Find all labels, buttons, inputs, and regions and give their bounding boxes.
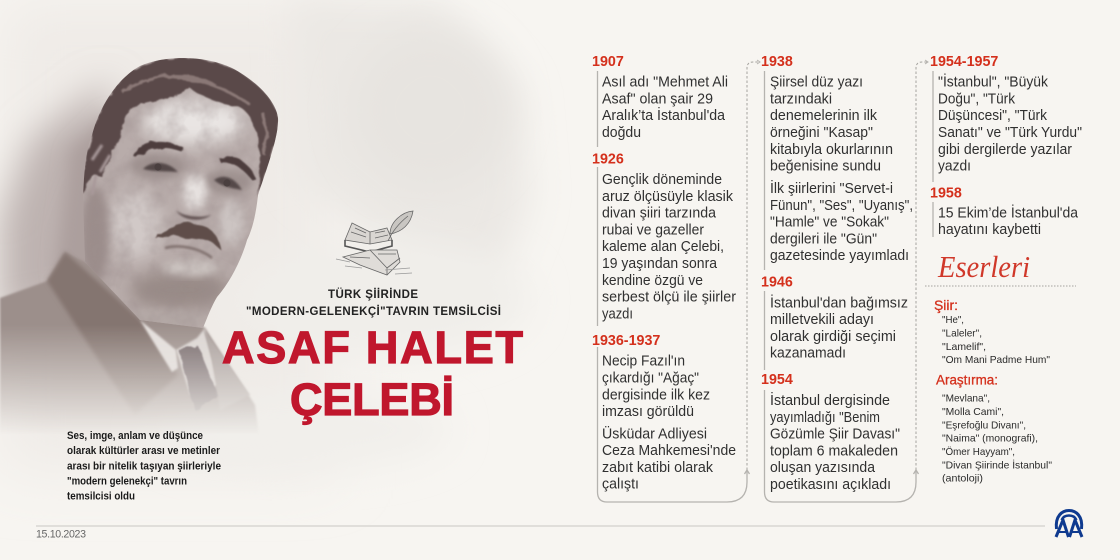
list: Araştırma: "Mevlana",: [942, 394, 990, 405]
timeline column 1: Aralık’ta İstanbul'da: [602, 106, 726, 124]
timeline column 2: kitabıyla okurlarının: [770, 142, 893, 158]
timeline column 2: gazetesinde yayımladı: [770, 248, 909, 264]
timeline column 1: Necip Fazıl'ın: [602, 354, 685, 370]
timeline column 1: Asıl adı "Mehmet Ali: [602, 75, 728, 91]
nose: [176, 210, 212, 220]
timeline column 3: "İstanbul", "Büyük: [938, 73, 1049, 91]
list: Araştırma: (antoloji): [942, 474, 983, 485]
footer line: [36, 525, 1045, 527]
mustache: [155, 224, 221, 250]
timeline column 2: Fünun", "Ses", "Uyanış",: [770, 198, 913, 214]
timeline column 2: 1938: [761, 54, 793, 70]
list: Araştırma: "Naima" (monografi),: [942, 434, 1038, 445]
note text: Ses, imge, anlam ve düşünce: [67, 430, 203, 442]
timeline column 1: [592, 54, 760, 502]
timeline column 3: gibi dergilerde yazılar: [938, 142, 1072, 158]
timeline column 3: Doğu", "Türk: [938, 91, 1016, 107]
timeline column 2: Gözümle Şiir Davası": [770, 427, 900, 443]
timeline column 1: zabıt katibi olarak: [602, 460, 714, 476]
date: 15.10.2023: [36, 529, 86, 541]
icon: books and quill: [336, 211, 413, 275]
timeline column 3: yazdı: [938, 159, 971, 175]
timeline column 2: olarak girdiği seçimi: [770, 329, 896, 345]
timeline column 2: "Hamle" ve "Sokak": [770, 215, 889, 231]
list: Araştırma: "Molla Cami",: [942, 407, 1004, 418]
note text: arası bir nitelik taşıyan şiirleriyle: [67, 460, 221, 472]
subtitle: [246, 288, 501, 318]
timeline column 1: aruz ölçüsüyle klasik: [602, 189, 734, 205]
timeline column 1: Gençlik döneminde: [602, 172, 722, 188]
title: ASAF HALET: [222, 322, 523, 373]
timeline column 1: çıkardığı "Ağaç": [602, 370, 699, 386]
hair: [78, 58, 278, 198]
eyes: [143, 163, 178, 172]
timeline column 2: İlk şiirlerini "Servet-i: [770, 179, 893, 197]
timeline column 3: 1958: [930, 185, 962, 201]
timeline column 1: divan şiiri tarzında: [602, 206, 717, 222]
timeline column 1: çalıştı: [602, 477, 639, 493]
title: [222, 322, 523, 425]
list: Şiir: "He",: [942, 315, 964, 326]
timeline column 2: milletvekili adayı: [770, 312, 874, 328]
list: Araştırma: [936, 372, 1052, 485]
timeline column 2: İstanbul'dan bağımsız: [770, 293, 908, 311]
subtitle: TÜRK ŞİİRİNDE: [328, 288, 418, 301]
portrait: head: [78, 50, 280, 330]
subtitle: "MODERN-GELENEKÇİ"TAVRIN TEMSİLCİSİ: [246, 305, 501, 318]
portrait: jacket and shirt: [0, 251, 256, 426]
timeline column 2: dergileri ile "Gün": [770, 231, 877, 247]
timeline column 1: 19 yaşından sonra: [602, 256, 718, 272]
list: Araştırma: "Eşrefoğlu Divanı",: [942, 420, 1026, 431]
eyebrows: [133, 142, 184, 158]
list: Şiir: "Laleler",: [942, 328, 982, 340]
list: Şiir: "Lamelif",: [942, 342, 986, 353]
timeline column 3: Sanatı" ve "Türk Yurdu": [938, 125, 1082, 141]
list: Şiir: Şiir:: [934, 298, 958, 313]
timeline column 2: Şiirsel düz yazı: [770, 75, 863, 91]
timeline column 2: 1954: [761, 372, 793, 388]
timeline column 3: hayatını kaybetti: [938, 222, 1041, 238]
timeline column 1: 1926: [592, 151, 624, 167]
timeline column 3: Düşüncesi", "Türk: [938, 108, 1048, 124]
timeline column 1: Ceza Mahkemesi'nde: [602, 443, 736, 459]
timeline column 1: yazdı: [602, 306, 633, 322]
timeline column 1: 1936-1937: [592, 333, 660, 349]
timeline column 1: Asaf" olan şair 29: [602, 91, 713, 107]
timeline column 1: kaleme alan Çelebi,: [602, 239, 724, 255]
timeline column 2: [761, 54, 928, 502]
timeline column 2: toplam 6 makaleden: [770, 443, 898, 459]
timeline column 1: doğdu: [602, 125, 641, 141]
timeline column 2: beğenisine sundu: [770, 159, 881, 175]
title: ÇELEBİ: [290, 374, 454, 425]
timeline column 2: örneğini "Kasap": [770, 125, 873, 141]
timeline column 2: denemelerinin ilk: [770, 108, 878, 124]
list: Araştırma: "Ömer Hayyam",: [942, 446, 1015, 458]
timeline column 1: 1907: [592, 54, 624, 70]
timeline column 2: 1946: [761, 275, 793, 291]
note text: [67, 430, 221, 503]
timeline column 2: poetikasını açıkladı: [770, 477, 891, 493]
timeline column 1: imzası görüldü: [602, 404, 694, 420]
timeline column 2: kazanamadı: [770, 346, 846, 362]
timeline column 2: İstanbul dergisinde: [770, 391, 890, 409]
timeline column 1: dergisinde ilk kez: [602, 387, 710, 403]
icon: AA logo: [1056, 510, 1082, 537]
note text: olarak kültürler arası ve metinler: [67, 445, 220, 457]
list: Araştırma: Araştırma:: [936, 372, 998, 387]
heading: Eserleri: Eserleri: [937, 249, 1030, 284]
timeline column 2: yayımladığı "Benim: [770, 410, 880, 426]
timeline column 2: tarzındaki: [770, 91, 832, 107]
timeline column 3: [930, 54, 1082, 238]
timeline column 1: serbest ölçü ile şiirler: [602, 290, 736, 306]
timeline column 1: rubai ve gazeller: [602, 222, 704, 238]
list: Şiir: "Om Mani Padme Hum": [942, 355, 1050, 366]
timeline column 2: oluşan yazısında: [770, 460, 876, 476]
timeline column 1: Üsküdar Adliyesi: [602, 424, 707, 442]
note text: "modern gelenekçi" tavrın: [67, 476, 187, 488]
note text: temsilcisi oldu: [67, 491, 135, 503]
timeline column 1: kendine özgü ve: [602, 273, 703, 289]
timeline column 3: 15 Ekim’de İstanbul'da: [938, 203, 1079, 221]
portrait shadow: [0, 80, 110, 320]
list: Araştırma: "Divan Şiirinde İstanbul": [942, 458, 1052, 471]
timeline column 3: 1954-1957: [930, 54, 998, 70]
list: Şiir: [934, 298, 1050, 366]
